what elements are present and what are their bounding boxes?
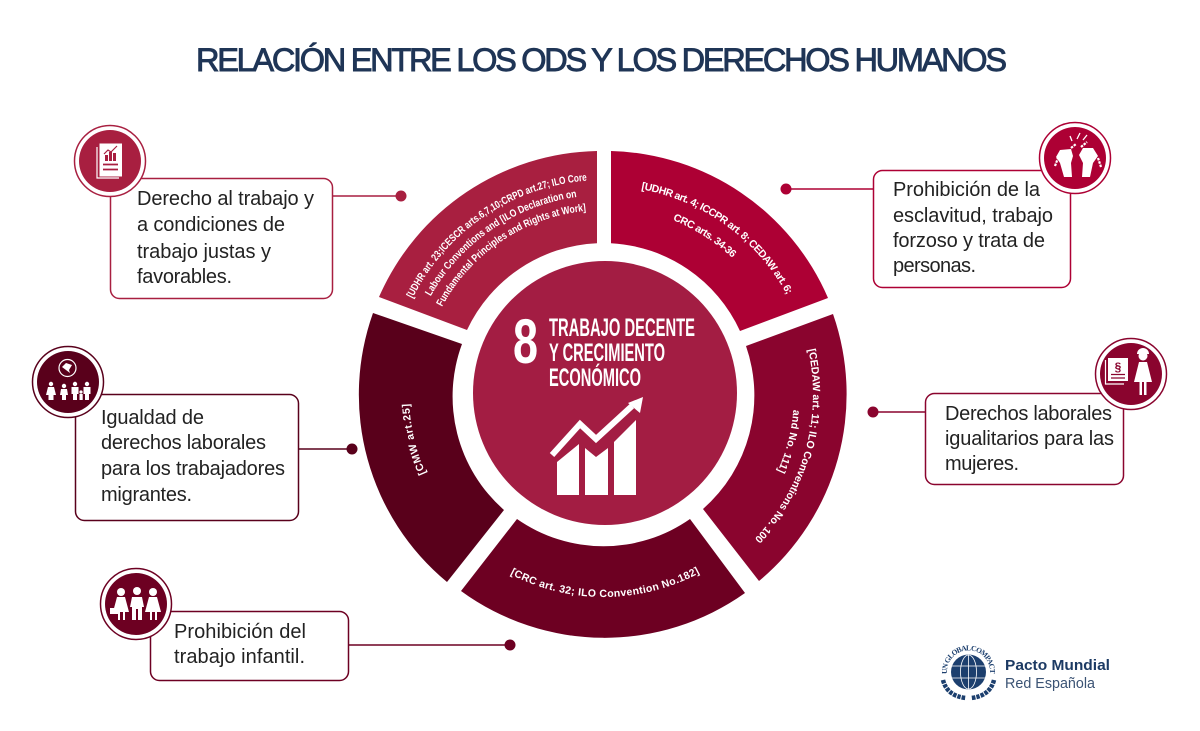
SDG name: ECONÓMICO xyxy=(549,362,641,392)
segment: slavery prohibition xyxy=(611,151,828,331)
text: personas. xyxy=(893,255,976,277)
text: Prohibición de la xyxy=(893,179,1041,201)
logo text xyxy=(1005,658,1110,692)
segment: migrant workers xyxy=(358,313,504,582)
SDG name: Y CRECIMIENTO xyxy=(549,339,665,367)
text: forzoso y trata de xyxy=(893,230,1045,252)
text: Derechos laborales xyxy=(945,403,1112,425)
text xyxy=(137,188,314,288)
icon: UN Global Compact globe: UN GLOBAL COMPACT xyxy=(942,645,995,674)
text: Igualdad de xyxy=(101,407,204,429)
text: trabajo infantil. xyxy=(174,646,305,668)
segment: slavery prohibition: [UDHR art. 4; ICCPR art. 8; CEDAW art. 6; xyxy=(641,182,792,294)
icon: broken chains xyxy=(1040,122,1110,194)
connector xyxy=(868,406,925,418)
SDG name xyxy=(549,314,695,392)
icon: document and woman: § xyxy=(1115,360,1122,374)
icon: children xyxy=(100,568,172,640)
segment: women's labour rights xyxy=(703,314,847,581)
icon: migrant family and globe xyxy=(32,346,104,418)
icon: UN Global Compact globe xyxy=(940,645,996,700)
segment: work rights xyxy=(379,151,597,330)
connector xyxy=(780,184,873,194)
callout: prohibición de la esclavitud xyxy=(780,122,1110,288)
segment: child labour: [CRC art. 32; ILO Convention No.182] xyxy=(510,566,700,598)
segment: slavery prohibition: CRC arts. 34-36 xyxy=(674,214,736,257)
logo text: Pacto Mundial xyxy=(1005,658,1110,674)
icon: growth chart xyxy=(552,397,643,495)
text: trabajo justas y xyxy=(137,241,271,263)
icon: report xyxy=(74,126,146,196)
text: para los trabajadores xyxy=(101,458,285,480)
text xyxy=(101,407,285,506)
text xyxy=(893,179,1053,277)
callout: derechos laborales mujeres xyxy=(868,338,1166,484)
text box xyxy=(110,178,332,298)
segment: child labour xyxy=(461,519,745,638)
text: Prohibición del xyxy=(174,621,306,643)
segment: work rights: Labour Conventions and [ILO Declaration on xyxy=(424,192,576,296)
text: mujeres. xyxy=(945,453,1019,475)
text: a condiciones de xyxy=(137,214,285,236)
text box xyxy=(926,394,1124,484)
text: favorables. xyxy=(137,266,232,288)
text: igualitarios para las xyxy=(945,428,1114,450)
ring diagram xyxy=(358,151,847,638)
logo text: Red Española xyxy=(1005,676,1096,692)
number 8: 8 xyxy=(513,307,538,377)
text: Derecho al trabajo y xyxy=(137,188,314,210)
text xyxy=(945,403,1114,475)
icon: document and woman xyxy=(1096,338,1166,410)
segment: work rights: Fundamental Principles and Rights at Work] xyxy=(436,203,586,306)
segment: women's labour rights: and No. 111] xyxy=(776,410,799,474)
title: RELACIÓN ENTRE LOS ODS Y LOS DERECHOS HUMANOS xyxy=(196,41,1007,78)
text box xyxy=(874,170,1070,288)
callout: derecho al trabajo xyxy=(74,126,406,298)
text box xyxy=(150,612,348,680)
segment: migrant workers: [CMW art.25] xyxy=(402,404,428,476)
connector xyxy=(299,444,358,454)
callout: trabajadores migrantes xyxy=(32,346,358,520)
connector xyxy=(333,190,406,202)
text xyxy=(174,621,306,668)
logo: Pacto Mundial xyxy=(940,645,1110,700)
text: migrantes. xyxy=(101,484,192,506)
text box xyxy=(76,394,298,520)
text: derechos laborales xyxy=(101,432,266,454)
connector xyxy=(349,640,516,650)
segment: women's labour rights: [CEDAW art. 11; ILO Conventions No. 100 xyxy=(756,348,820,543)
callout: trabajo infantil xyxy=(100,568,516,680)
SDG name: TRABAJO DECENTE xyxy=(549,314,695,342)
segment: work rights: [UDHR art. 23;ICESCR arts.6,7,10;CRPD art.27; ILO Core xyxy=(406,175,586,300)
text: esclavitud, trabajo xyxy=(893,205,1053,227)
center circle: SDG 8 xyxy=(473,261,737,525)
